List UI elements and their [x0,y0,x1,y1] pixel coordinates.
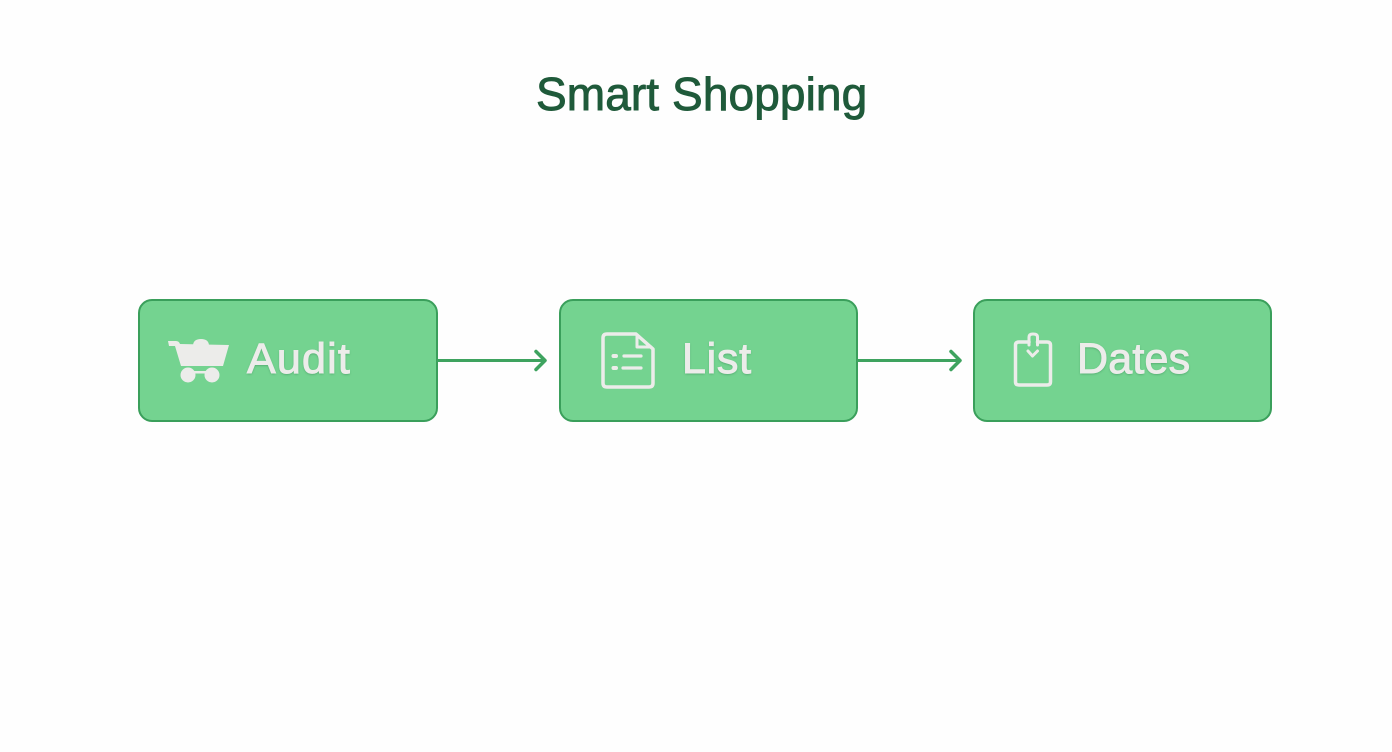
panel: list step [559,299,858,422]
label: Dates: Dates [1077,335,1190,383]
label: Audit: Audit [247,335,351,383]
title: Smart Shopping [536,68,867,120]
panel: audit step [138,299,438,422]
panel: dates step [973,299,1272,422]
label: List: List [682,335,752,383]
